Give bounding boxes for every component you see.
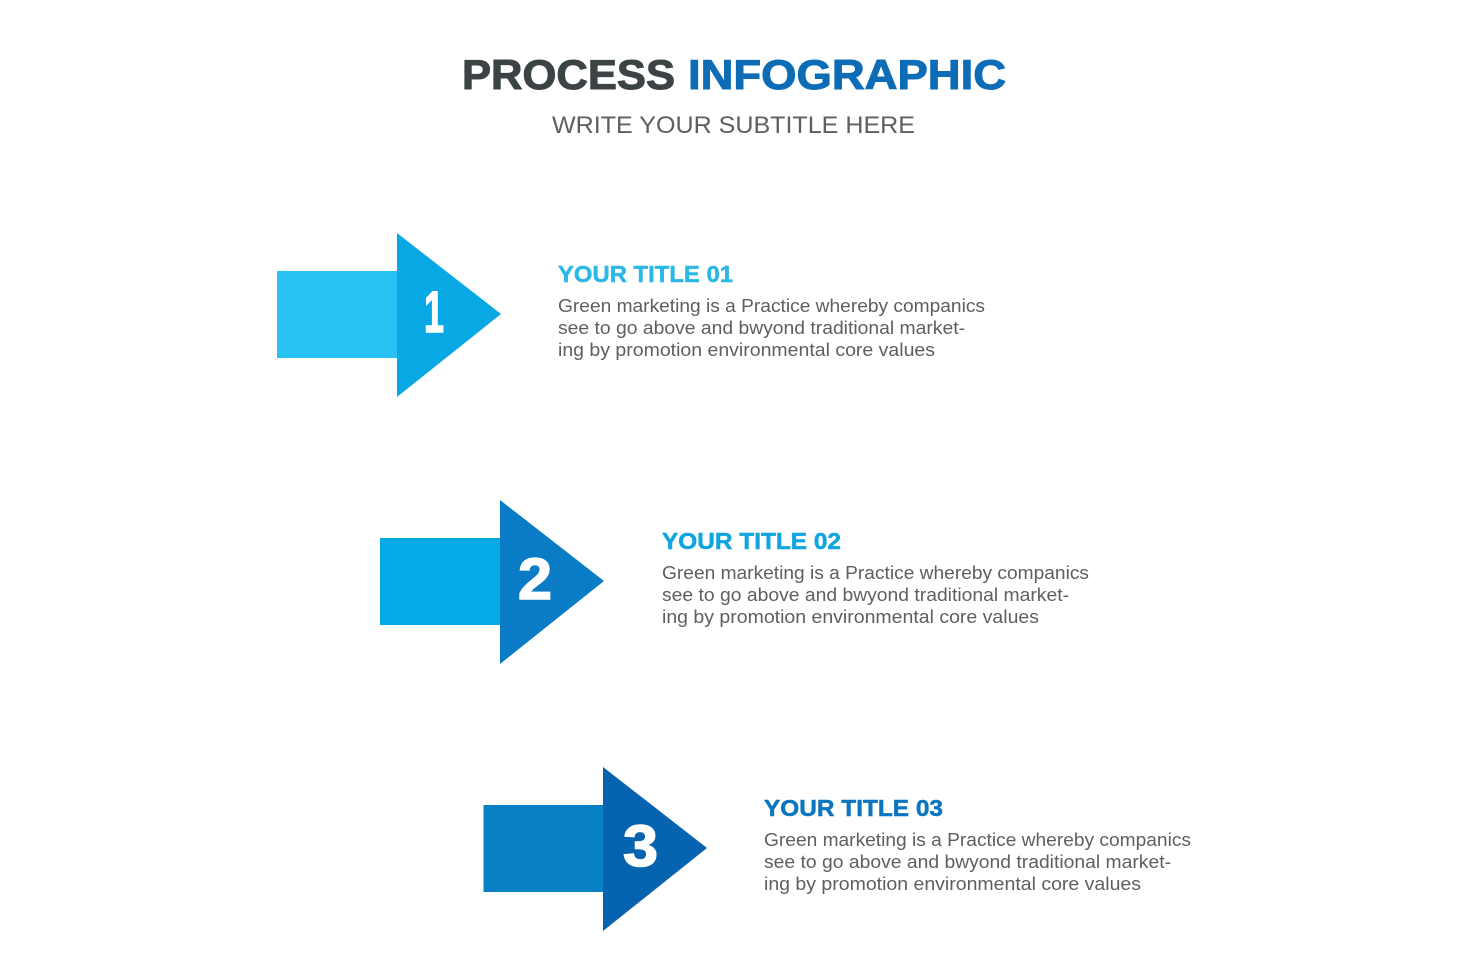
title: PROCESS bbox=[462, 51, 675, 98]
step 2 heading: YOUR TITLE 02 bbox=[662, 528, 841, 554]
arrow 1 bbox=[277, 233, 501, 397]
step 1 heading: YOUR TITLE 01 bbox=[558, 261, 733, 287]
arrow 2 bbox=[380, 500, 604, 664]
step 2 text: Green marketing is a Practice whereby companics bbox=[662, 563, 1089, 583]
step 3 text bbox=[764, 830, 1191, 894]
step 1 text: ing by promotion environmental core values bbox=[558, 340, 935, 360]
step 1 text: Green marketing is a Practice whereby companics bbox=[558, 296, 985, 316]
step 1 text bbox=[558, 296, 985, 360]
arrow 2: 2 bbox=[518, 547, 552, 612]
step 3 text: see to go above and bwyond traditional market- bbox=[764, 852, 1171, 872]
step 2 text bbox=[662, 563, 1089, 627]
arrow 3: 3 bbox=[623, 814, 658, 879]
step 2 bbox=[380, 500, 1089, 664]
arrow 1: 1 bbox=[424, 280, 444, 345]
title: INFOGRAPHIC bbox=[688, 51, 1006, 98]
step 1 text: see to go above and bwyond traditional market- bbox=[558, 318, 965, 338]
step 2 text: ing by promotion environmental core values bbox=[662, 607, 1039, 627]
subtitle: WRITE YOUR SUBTITLE HERE bbox=[552, 112, 915, 139]
arrow 3 bbox=[484, 767, 707, 931]
step 3 heading: YOUR TITLE 03 bbox=[764, 795, 943, 821]
step 1 bbox=[277, 233, 985, 397]
step 2 text: see to go above and bwyond traditional market- bbox=[662, 585, 1069, 605]
step 3 text: ing by promotion environmental core values bbox=[764, 874, 1141, 894]
title bbox=[462, 51, 1006, 98]
step 3 text: Green marketing is a Practice whereby companics bbox=[764, 830, 1191, 850]
step 3 bbox=[484, 767, 1191, 931]
